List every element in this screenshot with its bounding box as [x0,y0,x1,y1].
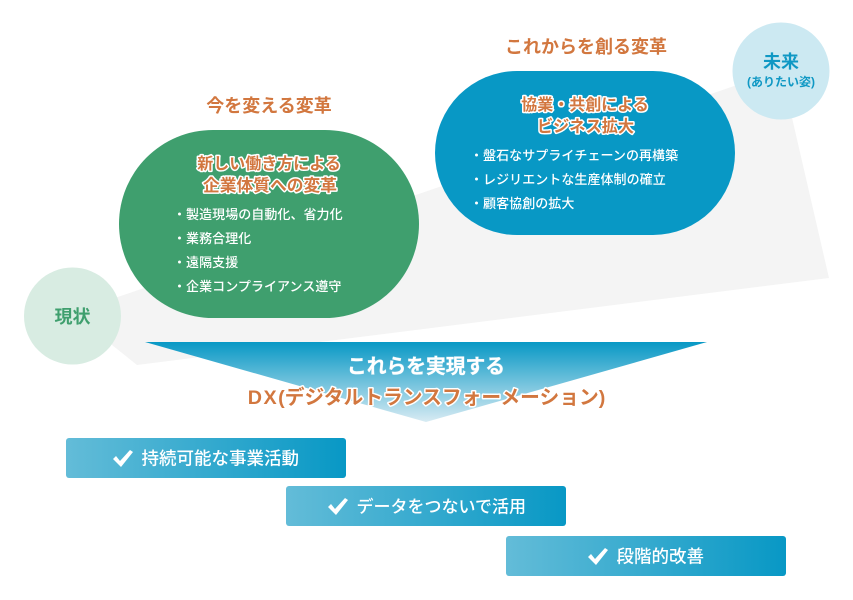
circle: current state: 現状 [54,307,90,327]
button: connect data [286,486,566,526]
blue pill heading: 協業・共創による [521,96,649,114]
green pill heading [197,154,341,195]
green pill list: ・遠隔支援 [173,255,238,270]
heading: change now: 今を変える変革 [206,95,332,116]
circle: future: (ありたい姿) [747,74,815,89]
green pill list: ・製造現場の自動化、省力化 [173,207,343,222]
downward triangle arrow [145,342,707,422]
circle: future: 未来 [763,52,799,72]
icon: check [588,548,608,565]
green pill list [173,207,343,294]
circle: current state [24,268,121,364]
button: connect data: データをつないで活用 [356,496,526,516]
background rising band [112,70,829,365]
blue pill list: ・顧客協創の拡大 [470,196,574,211]
panel: blue pill [435,71,735,235]
green pill heading: 新しい働き方による [197,154,341,173]
arrow text [248,356,605,409]
icon: check [113,450,133,467]
arrow text: これらを実現する [347,356,505,378]
blue pill list: ・盤石なサプライチェーンの再構築 [470,148,678,163]
button: gradual improvement: 段階的改善 [616,546,704,566]
blue pill heading [521,96,649,136]
circle: future [732,22,830,120]
icon: check [328,498,348,515]
button: gradual improvement [506,536,786,576]
blue pill heading: ビジネス拡大 [537,117,634,136]
green pill list: ・企業コンプライアンス遵守 [173,279,341,294]
blue pill list: ・レジリエントな生産体制の確立 [470,172,666,187]
green pill list: ・業務合理化 [173,231,251,246]
button: sustainable business: 持続可能な事業活動 [142,448,299,468]
blue pill list [470,148,678,211]
panel: green pill [119,130,419,318]
green pill heading: 企業体質への変革 [203,175,337,195]
arrow text: DX(デジタルトランスフォーメーション) [248,386,605,409]
heading: change to create: これからを創る変革 [505,36,667,57]
button: sustainable business [66,438,346,478]
